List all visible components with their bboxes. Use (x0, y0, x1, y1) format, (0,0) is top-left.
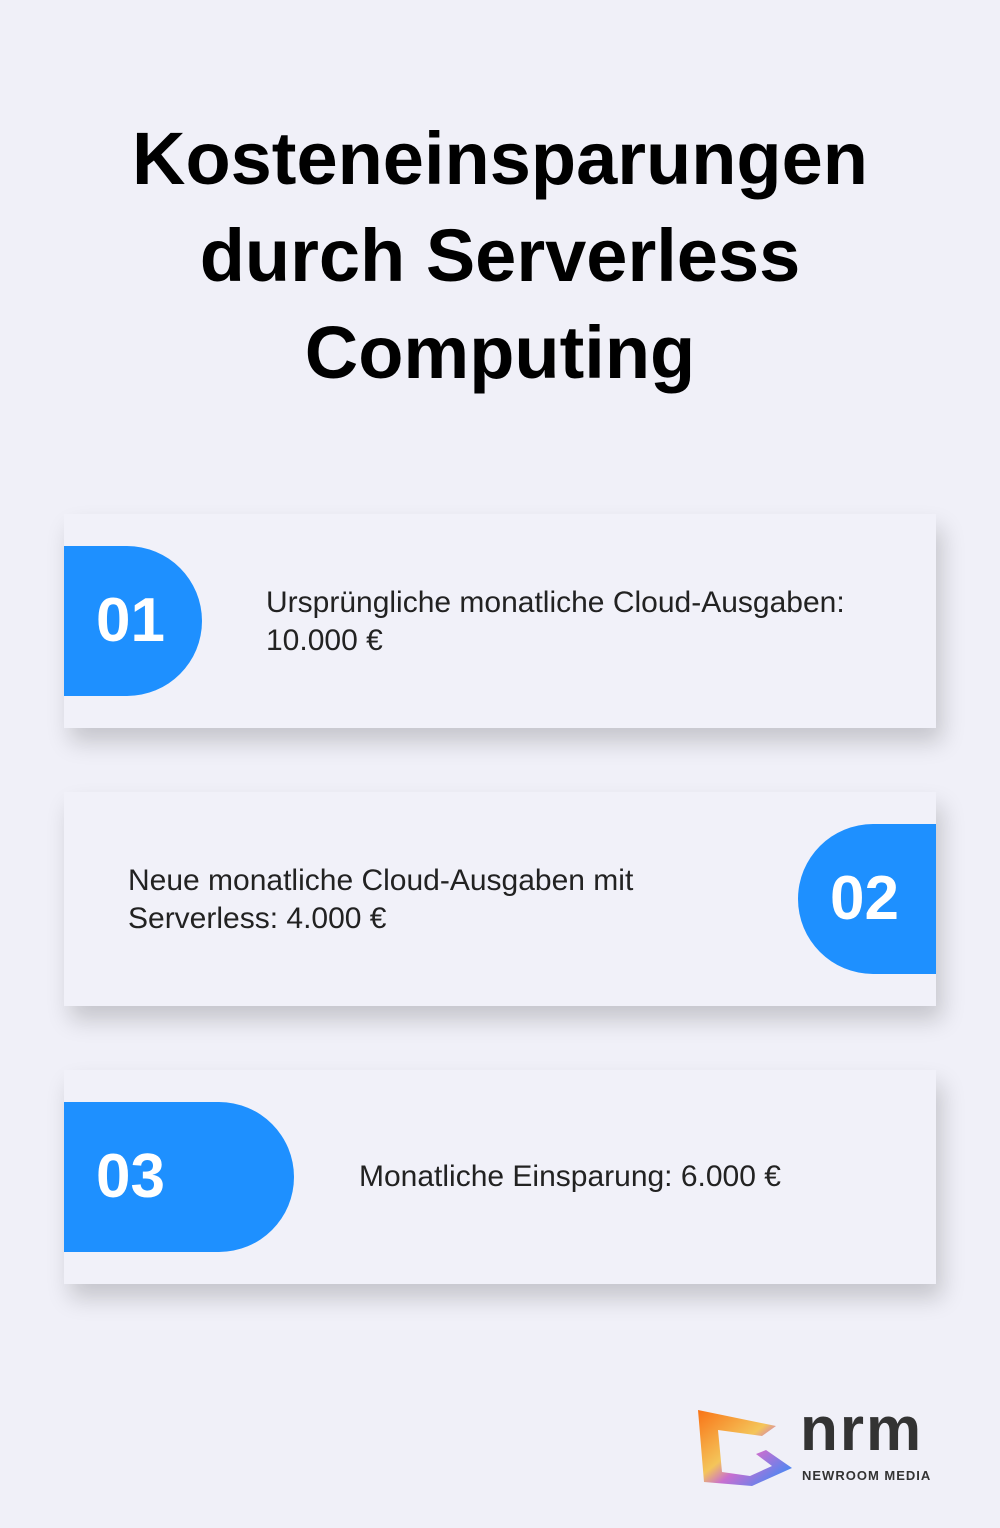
badge 03: 03 (96, 1142, 165, 1211)
text 2 (128, 864, 634, 935)
text 2: Neue monatliche Cloud-Ausgaben mit (128, 864, 633, 897)
card 1 (64, 514, 936, 728)
badge 01: 01 (96, 586, 165, 655)
card 2 (64, 792, 936, 1006)
title: Kosteneinsparungen (132, 117, 868, 200)
text 2: Serverless: 4.000 € (128, 902, 386, 935)
badge 02 (798, 824, 936, 974)
logo icon (698, 1410, 792, 1486)
text 1: Ursprüngliche monatliche Cloud-Ausgaben: (266, 586, 845, 619)
badge 02: 02 (830, 864, 899, 933)
title (132, 117, 868, 394)
title: durch Serverless (200, 214, 800, 297)
badge 01 (64, 546, 202, 696)
card 3 (64, 1070, 936, 1284)
text 3: Monatliche Einsparung: 6.000 € (359, 1160, 781, 1193)
text 1 (266, 586, 845, 657)
logo (698, 1395, 931, 1486)
title: Computing (305, 311, 695, 394)
text 1: 10.000 € (266, 624, 383, 657)
logo text: nrm (800, 1395, 923, 1464)
badge 03 (64, 1102, 294, 1252)
logo: NEWROOM MEDIA (802, 1468, 931, 1483)
